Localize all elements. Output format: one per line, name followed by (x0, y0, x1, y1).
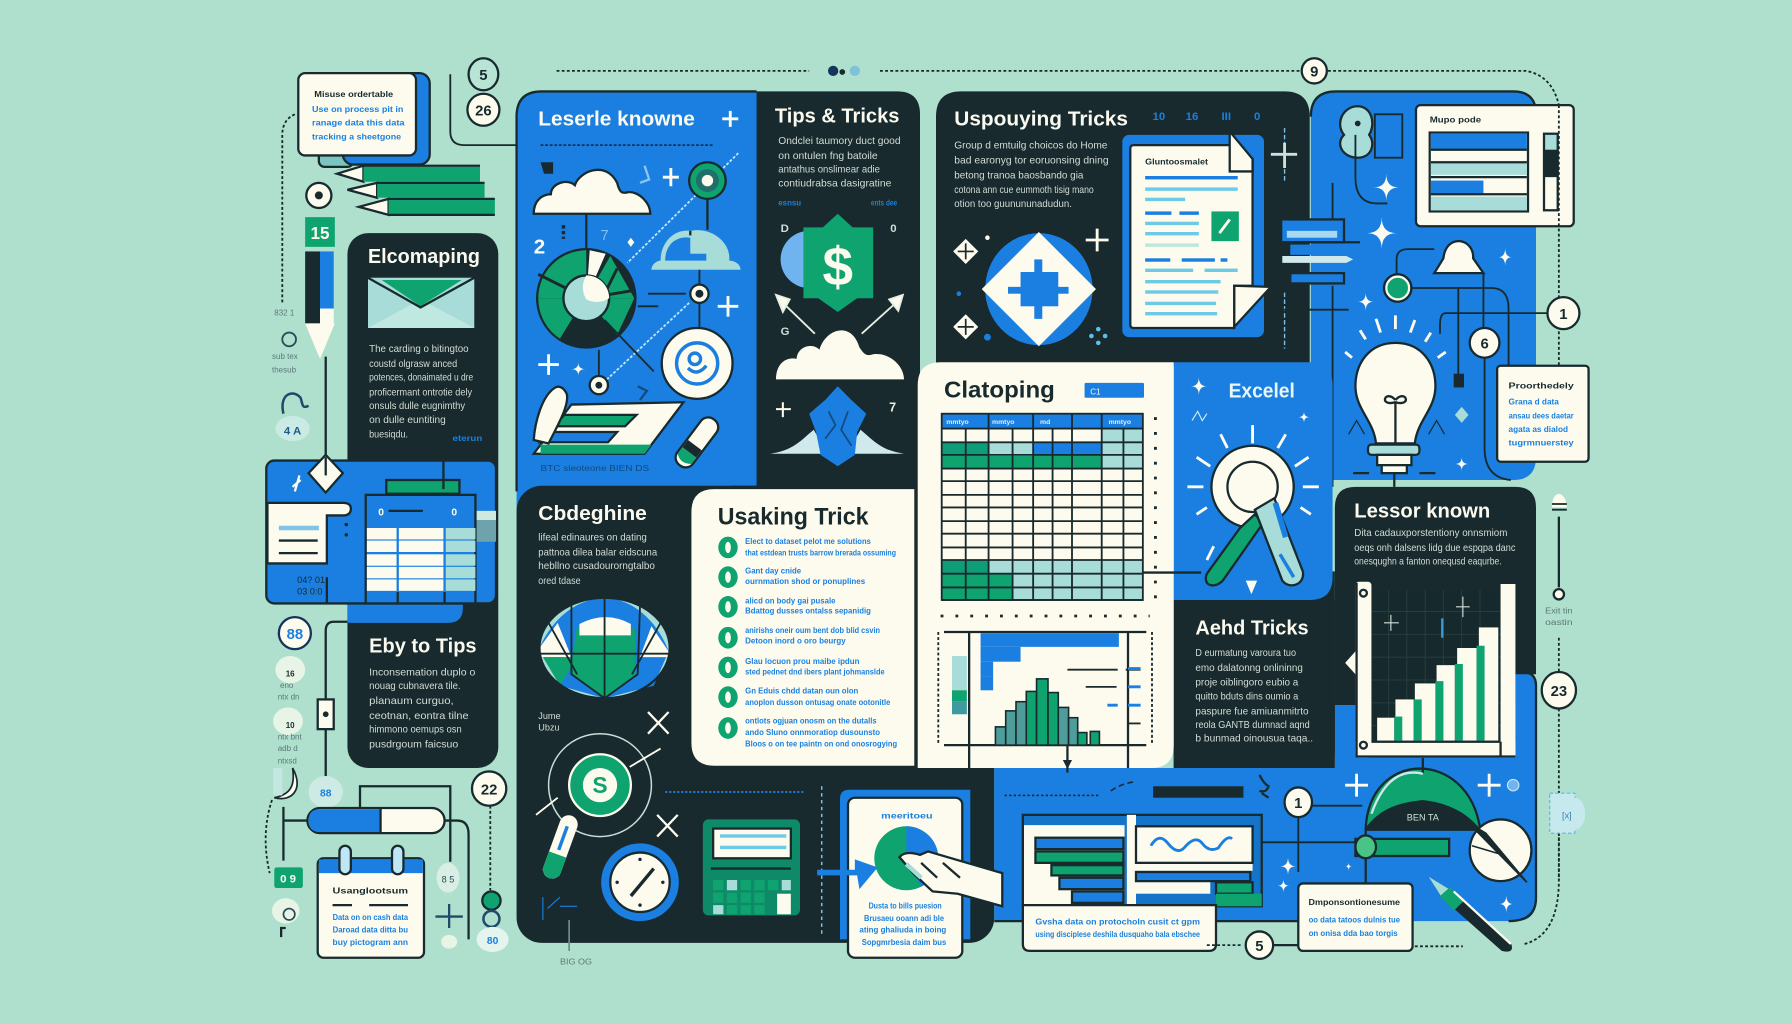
small caption (538, 711, 561, 732)
number badge 6 (1470, 328, 1499, 358)
body text (538, 533, 658, 587)
icon: cloud (534, 170, 650, 214)
icon: gauge: BEN TA (1407, 813, 1440, 823)
leader and caption: BIG OG (560, 958, 592, 967)
grey strip (477, 511, 496, 542)
body text: cotona ann cue eummoth tisig mano (954, 185, 1094, 196)
list item 1: Elect to dataset pelot me solutions (745, 537, 871, 546)
sparkles (1278, 857, 1513, 913)
heading: Leserle knowne (538, 108, 695, 131)
panel: Lesser known blue (517, 91, 757, 509)
small caption: Ubzu (538, 722, 560, 732)
connector with square node (318, 622, 347, 777)
body text: tips: ceotnan, eontra tilne (369, 711, 469, 722)
body text: tips: pusdrgoum faicsuo (369, 739, 458, 750)
blue label: C1 (1090, 387, 1101, 396)
note card right: agata as dialod (1509, 425, 1568, 434)
list item 5: Glau locuon prou maibe ipdun (745, 657, 860, 666)
body text: reola GANTB dumnacl aqnd (1195, 720, 1310, 731)
icon: pencils stack (337, 166, 495, 215)
blue label (1085, 383, 1144, 398)
digits: 7 (600, 228, 609, 244)
small blue labels: 16 (1186, 111, 1198, 123)
dotted diagonals (607, 153, 738, 379)
table (366, 495, 475, 603)
icon: diamond marker (309, 455, 343, 493)
heading: Cbdeghine (538, 502, 647, 525)
body text: Dita cadauxporstentiony onnsmiom (1354, 528, 1507, 539)
list item 2: Gant day cnide (745, 567, 802, 576)
caption arc: meeritoeu (881, 811, 933, 820)
note card lower right: on onisa dda bao torgis (1309, 929, 1398, 938)
panel: document: Gluntoosmalet (1145, 158, 1208, 167)
connector: table to tool (1143, 572, 1201, 574)
body text: potences, donaimated u dre (369, 373, 473, 384)
body text: Group d emtuilg choicos do Home (954, 141, 1107, 152)
bar chart (1345, 582, 1515, 758)
number badge 88: 88 (287, 627, 303, 643)
card: mini table (1416, 105, 1574, 226)
body text: The carding o bitingtoo (369, 344, 469, 355)
panel: Usaking Trick (691, 489, 914, 766)
icon: stacked blue blocks (1281, 219, 1360, 283)
digits: 0 (890, 223, 897, 235)
heading: Tips & Tricks (775, 104, 899, 127)
body text: onsuls dulle eugnimthy (369, 401, 465, 412)
green tab (386, 440, 459, 494)
heading: Aehd Tricks (1195, 616, 1309, 639)
spreadsheet: mmtyo (1109, 419, 1131, 426)
left blob annotations: 16 (286, 670, 295, 679)
note below dashboard: Gvsha data on protocholn cusit ct gpm (1035, 918, 1200, 927)
icon: sketch (543, 897, 577, 920)
sparkles (1191, 377, 1310, 423)
icon: cloud (776, 330, 904, 379)
bars (1035, 838, 1123, 903)
note card right: tugrmnuerstey (1509, 439, 1574, 448)
heading: Usaking Trick (718, 504, 869, 531)
body text: ored tdase (538, 576, 581, 587)
marks (648, 712, 678, 837)
digits (534, 225, 609, 259)
list item 6: anoplon dusson ontusag onate ootonitle (745, 698, 891, 707)
spreadsheet: mmtyo (992, 419, 1014, 426)
icon: blue badge with wings: 7 (889, 400, 896, 414)
icon: green tag: 15 (310, 223, 330, 243)
body text: betong tranoa baosbando gia (954, 170, 1084, 181)
number badge 5 with connectors (1207, 834, 1559, 959)
body text (1354, 528, 1516, 568)
panel: right blue light bulb (1280, 91, 1574, 487)
body text: on ontulen fng batoile (778, 151, 878, 162)
note card lower right (1298, 883, 1413, 951)
body text: Sopgmrbesia daim bus (862, 938, 947, 947)
body text: tips: Inconsemation duplo o (369, 667, 475, 678)
icon: moon and bubble: 88 (320, 789, 332, 800)
left small annotation icons (272, 308, 310, 441)
histogram frame (938, 632, 1152, 768)
table: 0 (451, 507, 457, 518)
wave panel (1136, 826, 1253, 863)
panel: calendar note (318, 846, 424, 958)
body text: b bunmad oinousua taqa.. (1195, 734, 1313, 745)
body text (369, 344, 473, 441)
panel: Aehd Tricks (1174, 600, 1335, 768)
step bars (981, 633, 1119, 690)
side bar (952, 656, 967, 714)
bulb rays (1345, 315, 1446, 358)
list item 4 (718, 626, 880, 649)
dotted and dark bar (1005, 775, 1269, 798)
panel: Lessor known (1335, 487, 1536, 705)
connector lines (1280, 183, 1511, 487)
note card top left: Misuse ordertable (314, 90, 394, 99)
note card top left (298, 73, 430, 167)
small blue labels: esnsu (778, 199, 801, 208)
rays (1187, 425, 1319, 560)
icon: dollar tile (781, 214, 873, 312)
icon: small eye (306, 183, 331, 208)
icon: note and plus (627, 166, 679, 247)
body text: tips (369, 667, 475, 750)
left blob annotations: 10 (286, 721, 295, 730)
body text: Ondclei taumory duct good (778, 136, 901, 147)
icon: pin (1340, 106, 1402, 203)
marks (1271, 128, 1297, 349)
left small annotation icons: thesub (272, 366, 297, 375)
heading: Excelel (1229, 380, 1295, 403)
icon: green node (1384, 274, 1411, 302)
body text (778, 136, 901, 189)
note card lower right: Dmponsontionesume (1309, 898, 1401, 907)
small blue labels: III (1222, 111, 1231, 123)
list item 3: alicd on body gai pusale (745, 596, 836, 605)
list item 1: that estdean trusts barrow brerada ossuming (745, 548, 896, 557)
small blue labels (778, 199, 898, 208)
number badge 9 (1302, 58, 1327, 83)
panel: hand pointing chart card (817, 790, 970, 958)
panel: blue table card (266, 440, 496, 623)
icon: target with tools (1206, 446, 1303, 585)
number badge 22 with connector (472, 771, 509, 952)
panel: Elcomaping left column (347, 233, 498, 768)
icon: dollar tile: $ (822, 236, 853, 298)
icon: sparkles (953, 229, 1109, 345)
body text: ating ghaliuda in boing (859, 926, 946, 935)
note tag right: [x] (1562, 810, 1572, 820)
body text: D eurmatung varoura tuo (1195, 648, 1296, 659)
body text (859, 902, 947, 947)
dotted lines (665, 786, 822, 936)
icon: green check tile (1211, 211, 1239, 241)
panel: Cbdeghine dark lower (517, 486, 994, 943)
body text: contiudrabsa dasigratine (778, 178, 891, 189)
icon: envelope (368, 278, 474, 328)
panel: Tips and Tricks (727, 91, 941, 503)
icon: magnifier with S (536, 734, 661, 881)
icon: light bulb (1349, 343, 1445, 487)
list item 1 (718, 537, 896, 558)
body text: hebllno cusadourorngtalbo (538, 561, 655, 572)
note card right: ansau dees daetar (1509, 411, 1574, 420)
panel: Uspouying Tricks (936, 91, 1310, 366)
number badge 88 (279, 617, 311, 649)
plus marks (538, 354, 647, 400)
note below dashboard (1023, 905, 1216, 951)
list item 4: anirishs oneir oum bent dob blid csvin (745, 626, 880, 635)
small blue labels: ents dee (871, 199, 898, 208)
tick marks (1067, 669, 1141, 723)
note card right: Proorthedely (1509, 382, 1574, 391)
number badge 1: 1 (1559, 307, 1568, 323)
caption: BTC sleoteone BIEN DS (541, 464, 649, 473)
body text (954, 141, 1109, 210)
list item 3 (718, 596, 871, 618)
icon: hand (899, 851, 1002, 906)
number badge 5 with connectors: 5 (1255, 939, 1264, 955)
panel: calendar note: buy pictogram ann (333, 938, 408, 947)
number badge 1 (1440, 297, 1579, 334)
icon: moon and bubble (273, 768, 343, 808)
icon: small marker (1454, 374, 1469, 423)
dotted borders (941, 417, 1155, 616)
body text: proficermant ontrotie dely (369, 387, 472, 398)
body text: bad earonyg tor eoruonsing dning (954, 155, 1109, 166)
icon: green coin (689, 162, 726, 230)
arrow (1063, 745, 1072, 773)
number badges 5 and 26: 26 (475, 103, 492, 119)
spreadsheet: md (1040, 419, 1050, 426)
icon: flag (541, 162, 553, 174)
card: mini table: Mupo pode (1430, 115, 1482, 124)
small caption: Jume (538, 711, 561, 721)
body text: pattnoa dilea balar eidscuna (538, 547, 658, 558)
icon: dome (1434, 241, 1483, 273)
right dotted connector (1558, 105, 1560, 366)
number badge 23: 23 (1551, 684, 1567, 700)
number badge 1 (1262, 787, 1362, 872)
bars (1377, 627, 1498, 741)
heading: tips: Eby to Tips (369, 635, 477, 658)
icon: magnifier with S: S (592, 772, 608, 798)
digits: G (781, 326, 790, 338)
icon: small cloud (651, 230, 741, 270)
table: 0 (378, 507, 384, 518)
body text: coustd olgrasw anced (369, 359, 457, 370)
body text: lifeal edinaures on dating (538, 533, 647, 544)
note card right: Grana d data (1509, 398, 1559, 407)
body text: tips: planaum curguo, (369, 696, 454, 707)
body text: Dusta to bills puesion (869, 902, 942, 911)
note card top left: tracking a sheetgone (312, 132, 402, 141)
left blob annotations (273, 656, 305, 765)
number badges 5 and 26: 5 (479, 68, 488, 84)
plus marks (1345, 774, 1519, 797)
icon: tall pencil (305, 251, 335, 457)
number badge 23 (1542, 672, 1576, 880)
icon: pie and needle (1469, 819, 1531, 882)
left small annotation icons: 4 A (284, 425, 301, 437)
icon: figure (293, 475, 301, 491)
icon: green tag small: 0 9 (280, 873, 296, 885)
panel: lower blue dashboard area (994, 672, 1536, 951)
heading: Lessor known (1354, 500, 1490, 523)
connectors (590, 270, 738, 394)
icon: globe (539, 598, 670, 698)
icon: clock (601, 843, 679, 921)
list item 7: Bloos o on tee paintn on ond onosrogying (745, 739, 897, 748)
digits: 2 (534, 236, 545, 259)
left small annotation icons: sub tex (272, 352, 298, 361)
right annotation with ring (1545, 494, 1573, 672)
list item 6 (718, 686, 891, 708)
icon: pen (1429, 877, 1512, 952)
body text: quitto bduts dins oumio a (1195, 691, 1299, 702)
spreadsheet: mmtyo (946, 419, 969, 426)
body text: oeqs onh dalsens lidg due espqpa danc (1354, 543, 1516, 554)
small blue caption: eterun (453, 434, 482, 443)
left small annotation icons: 832 1 (274, 308, 295, 317)
panel: Excelel (1174, 362, 1335, 768)
body text: onesqughn a fanton onequsd eaqurbe. (1354, 557, 1502, 568)
plus (722, 111, 738, 127)
list item 7: ontlots ogjuan onosm on the dutalls (745, 716, 877, 725)
connector (727, 452, 941, 454)
icon: green tag small (274, 867, 303, 888)
icon: donut chart (536, 248, 637, 349)
list item 6: Gn Eduis chdd datan oun olon (745, 687, 858, 696)
note card lower right: oo data tatoos dulnis tue (1309, 915, 1401, 924)
triangle (1246, 581, 1257, 594)
note below dashboard: using disciplese deshila dusquaho bala ebschee (1035, 930, 1200, 939)
panel: document (1122, 131, 1271, 337)
list item 5 (718, 657, 885, 678)
list item 2: ournmation shod or ponuplines (745, 577, 866, 586)
icon: open folder (534, 387, 683, 454)
body text: emo dalatonng onlininng (1195, 663, 1303, 674)
icon: green slider (1355, 835, 1449, 858)
note card top left: ranage data this data (312, 119, 405, 128)
leader and caption (560, 920, 592, 967)
note tag right (1550, 793, 1585, 833)
icon: lower blob (272, 898, 299, 937)
note card right (1497, 366, 1589, 462)
chart frame (1355, 582, 1515, 758)
lower rows (1136, 864, 1262, 906)
icon: blue badge with wings (770, 386, 904, 466)
list item 4: Detoon inord o oro beurgy (745, 636, 846, 645)
left blob annotations: adb d (278, 744, 298, 753)
heading: Elcomaping (368, 245, 480, 268)
icon: small plus and blobs: 8 5 (442, 874, 454, 884)
icon: sparkles (1358, 174, 1512, 471)
number badge 22 with connector: 22 (481, 782, 497, 798)
top dotted connector (557, 66, 1559, 105)
body text: proje oiblingoro eubio a (1195, 678, 1299, 689)
body text: antathus onslimear adie (778, 165, 880, 176)
digits: D (781, 223, 789, 235)
left blob annotations: eno (280, 681, 294, 690)
note card top left: Use on process pit in (312, 105, 404, 114)
cream tab (267, 503, 351, 563)
panel: calendar note: Usanglootsum (333, 887, 408, 896)
blue arrow (817, 859, 878, 889)
caption (297, 575, 327, 603)
list item 7: ando Sluno onnmoratiop dusounsto (745, 728, 880, 737)
list item 5: sted pednet dnd ibers plant johmanslde (745, 667, 885, 676)
body text: paspure fue amiuanmitrto (1195, 706, 1309, 717)
number badges 5 and 26 (450, 58, 517, 145)
caption: 04? 01 (297, 575, 325, 585)
icon: capsule (672, 414, 722, 471)
body text (1195, 648, 1313, 745)
number badge 1: 1 (1294, 796, 1302, 812)
body text: on dulle euntiting (369, 415, 446, 426)
body text: tips: nouag cubnavera tile. (369, 681, 461, 692)
small blue labels (1153, 111, 1260, 123)
number badge 6: 6 (1480, 337, 1489, 353)
body text: buesiqdu. (369, 430, 408, 441)
list item 7 (718, 716, 897, 748)
list item 2 (718, 566, 866, 588)
icon: small plus and blobs (435, 863, 463, 949)
chart sparkles (1384, 597, 1470, 638)
pie chart (874, 826, 938, 890)
number badge 22 with connector: 80 (487, 936, 499, 947)
left dotted connector (282, 114, 295, 303)
caption: 03 0:0 (297, 586, 323, 596)
heading: Clatoping (944, 377, 1055, 403)
icon: gauge (1366, 758, 1481, 886)
number badge 9: 9 (1310, 65, 1318, 81)
right annotation with ring: Exit tin (1545, 607, 1573, 616)
body text: tips: himmono oemups osn (369, 725, 462, 736)
histogram bars (995, 679, 1099, 745)
panel: calendar note: Daroad data ditta bu (333, 926, 408, 935)
body text: otion too guunununadudun. (954, 199, 1072, 210)
small blue labels: 10 (1153, 111, 1165, 123)
small blue labels: 0 (1254, 111, 1260, 123)
dashboard (1023, 815, 1262, 906)
left blob annotations: ntx bnt (278, 732, 303, 741)
right annotation with ring: oastin (1545, 618, 1573, 627)
body text: Brusaeu ooann adi ble (864, 914, 945, 923)
left blob annotations: ntx dn (278, 692, 300, 701)
left blob annotations: ntxsd (278, 756, 297, 765)
icon: calculator (703, 819, 800, 915)
panel: calendar note: Data on on cash data (333, 913, 409, 922)
list item 3: Bdattog dusses ontalss sepanidig (745, 607, 871, 616)
heading: Uspouying Tricks (954, 108, 1128, 131)
arrows (776, 295, 903, 334)
icon: green tag (305, 217, 335, 247)
panel: Clatoping (916, 362, 1174, 773)
icon: diamond tile (982, 232, 1096, 346)
icon: target circle (662, 328, 733, 399)
spreadsheet (942, 414, 1143, 600)
icon: progress pill with connectors (266, 786, 469, 939)
digits (781, 223, 897, 338)
